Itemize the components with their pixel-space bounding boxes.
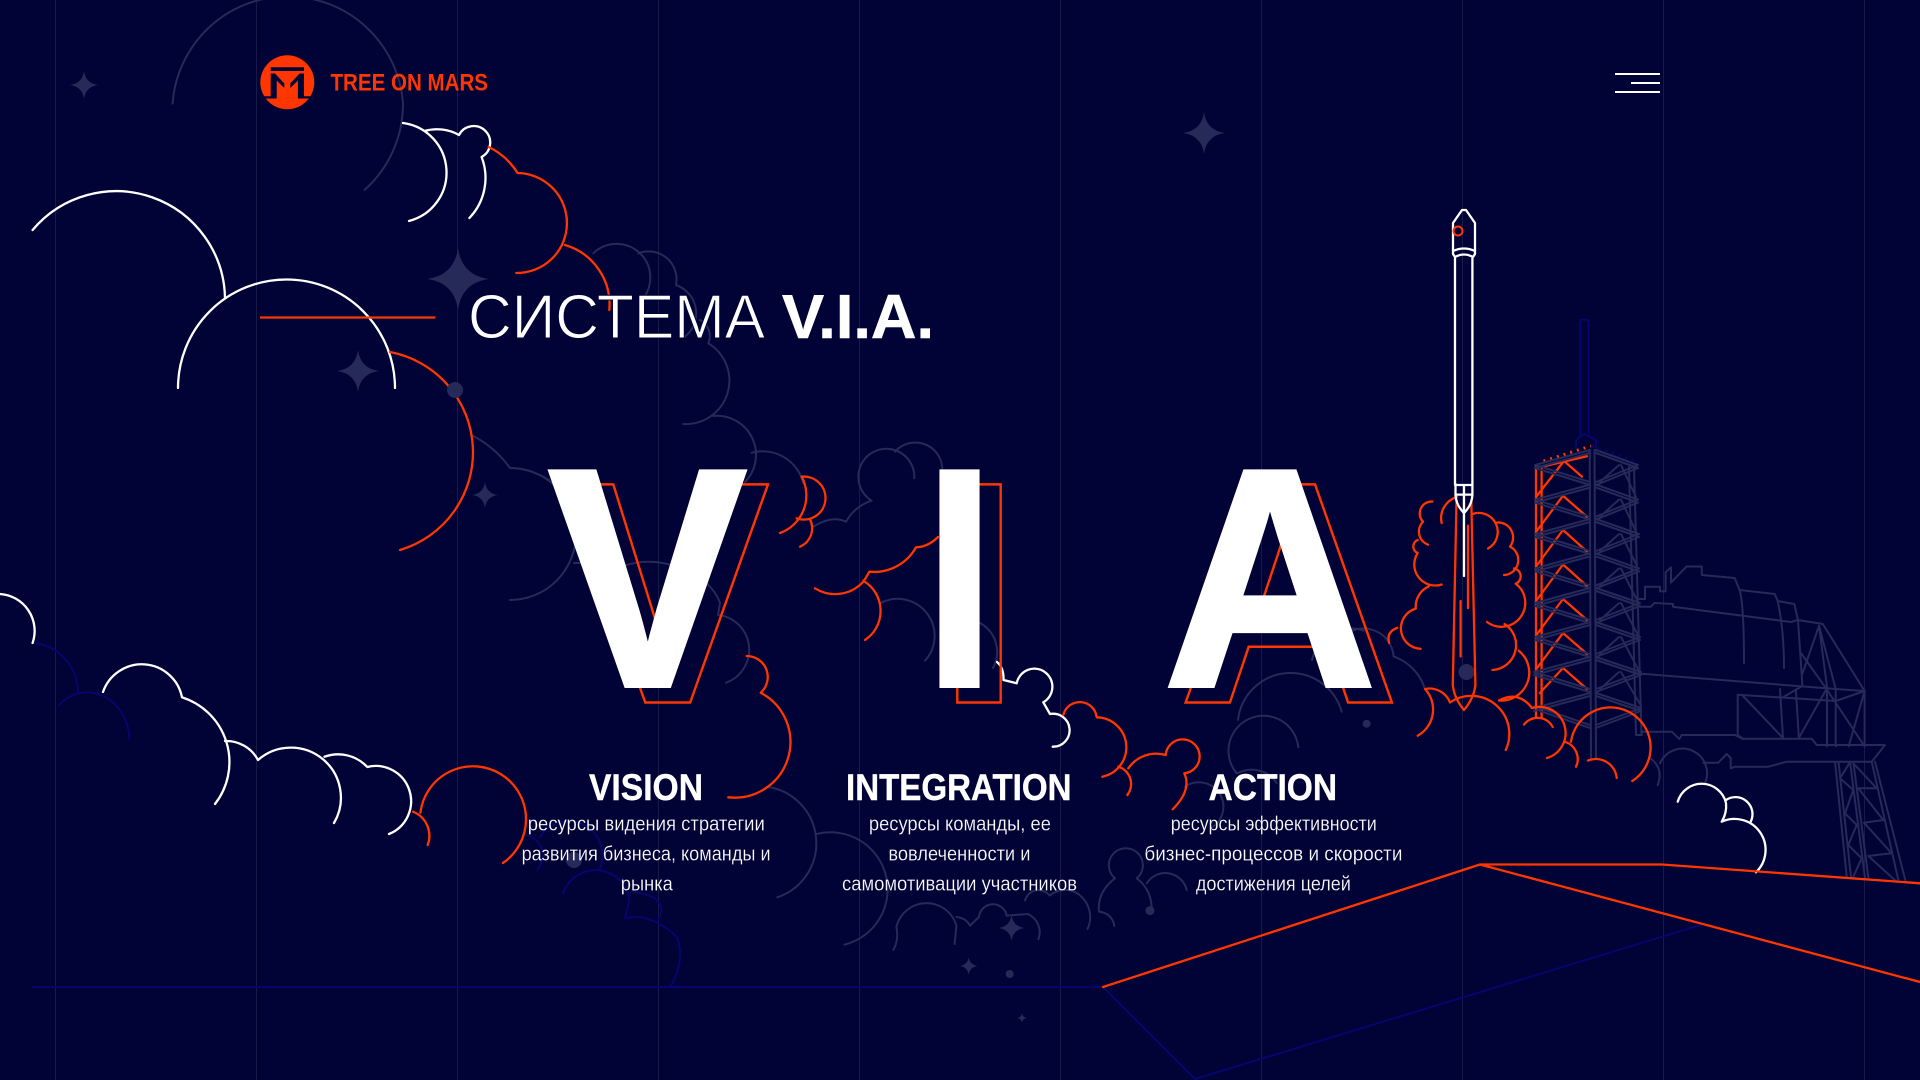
- white clouds: [0, 123, 1766, 872]
- rocket flame: [1453, 501, 1475, 710]
- orange tower frame: [1536, 446, 1591, 718]
- title: [468, 283, 934, 352]
- big letter V: V: [548, 404, 748, 752]
- dot on text: [566, 852, 582, 868]
- column: integration: ресурсы команды, ее: [869, 814, 1051, 836]
- column: action: бизнес-процессов и скорости: [1144, 844, 1402, 866]
- column: integration: самомотивации участников: [842, 874, 1077, 896]
- column: integration: INTEGRATION: [846, 767, 1072, 808]
- title: СИСТЕМА: [468, 283, 766, 352]
- big letter A: A: [1178, 416, 1400, 771]
- orange clouds: [390, 147, 1200, 863]
- column: action: [1144, 767, 1402, 896]
- column: vision: VISION: [589, 767, 703, 808]
- orange dot on cloud: [447, 382, 463, 398]
- launch tower: [1534, 446, 1642, 758]
- column: vision: ресурсы видения стратегии: [528, 814, 765, 836]
- menu icon: [1615, 73, 1660, 93]
- orange foreground lines: [260, 318, 1920, 987]
- column: action: достижения целей: [1196, 874, 1351, 896]
- column: action: ресурсы эффективности: [1171, 814, 1377, 836]
- logo mark: [259, 55, 316, 109]
- title: V.I.A.: [782, 283, 934, 352]
- column: integration: [842, 767, 1077, 896]
- decorative stars and dots: [70, 71, 1474, 1023]
- rocket body: [1453, 210, 1475, 576]
- launch pad structure: [1636, 566, 1906, 882]
- logo: [259, 55, 488, 109]
- logo wordmark: TREE ON MARS: [330, 70, 488, 97]
- column: vision: развития бизнеса, команды и: [522, 844, 771, 866]
- column: integration: вовлеченности и: [888, 844, 1030, 866]
- dim tower frame: [1534, 450, 1642, 758]
- rocket: [1453, 210, 1475, 710]
- big letter V: V: [565, 416, 772, 771]
- big letter I: I: [924, 405, 995, 753]
- column: vision: [522, 767, 771, 896]
- big letter A: A: [1163, 405, 1377, 753]
- column: action: ACTION: [1208, 767, 1337, 808]
- background dim clouds: [173, 0, 1707, 950]
- dark blue clouds and ground: [33, 320, 1702, 1079]
- rocket exhaust cloud: [1388, 497, 1651, 781]
- big letter I: I: [937, 415, 1021, 770]
- column: vision: рынка: [621, 874, 674, 896]
- rocket logo: [1454, 226, 1462, 236]
